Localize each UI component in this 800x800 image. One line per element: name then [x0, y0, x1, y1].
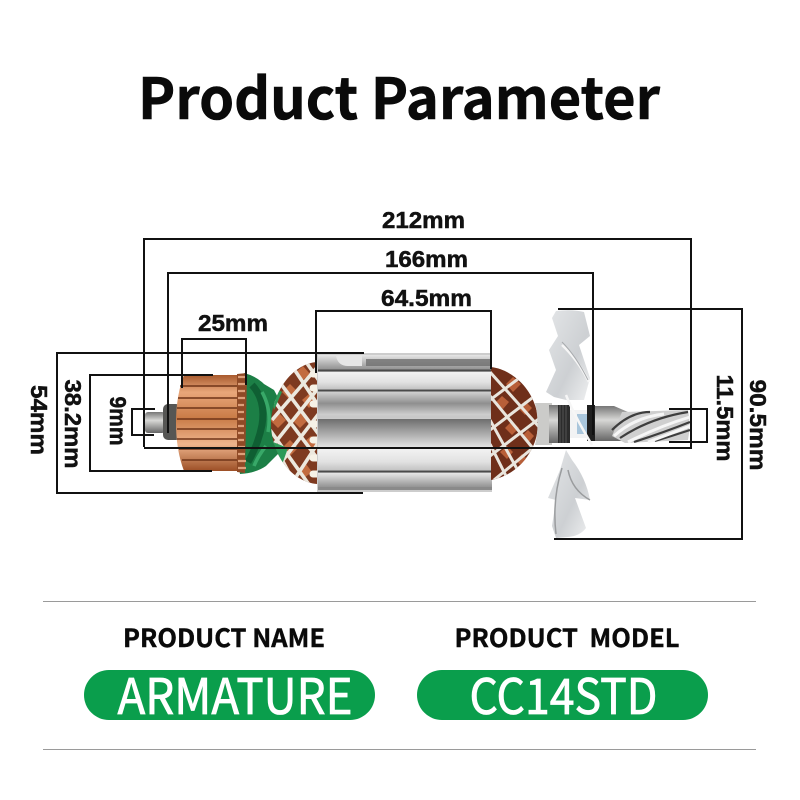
bearing collar — [163, 404, 181, 440]
dimension: 38.2mm bracket — [90, 375, 213, 471]
label: 212mm: 212mm — [382, 207, 465, 233]
label: 9mm: 9mm — [105, 396, 131, 446]
dimension: 90.5mm bracket — [554, 309, 742, 539]
fan blades — [546, 310, 592, 538]
heading: product name: PRODUCT NAME — [123, 619, 325, 655]
label: 64.5mm: 64.5mm — [381, 285, 472, 311]
left winding — [271, 362, 317, 484]
left winding terminals — [313, 374, 317, 474]
heading: product model: PRODUCT MODEL — [454, 619, 680, 655]
dimension: 11.5mm bracket — [669, 409, 707, 442]
dimension lines — [57, 239, 742, 539]
label: 166mm: 166mm — [385, 246, 468, 272]
dimension: 25mm bracket — [182, 339, 246, 388]
product image: armature — [145, 310, 690, 538]
dimension: 64.5mm bracket — [316, 311, 491, 373]
title: Product Parameter — [138, 54, 660, 136]
dimension: 212mm bracket — [144, 239, 691, 448]
commutator — [176, 373, 247, 473]
dimension: 9mm bracket — [132, 409, 155, 435]
label: 25mm: 25mm — [198, 310, 268, 336]
fan hub and right shaft — [535, 403, 628, 445]
dimension: 54mm bracket — [57, 353, 364, 493]
pill: model number: CC14STD — [470, 658, 658, 729]
pill: armature: ARMATURE — [118, 658, 352, 729]
worm gear — [612, 410, 690, 443]
laminated core — [317, 353, 492, 492]
green insulation neck — [234, 373, 290, 474]
bottom divider — [43, 749, 756, 750]
dimension: 166mm bracket — [168, 273, 593, 435]
label: 38.2mm: 38.2mm — [60, 380, 86, 468]
label: 90.5mm: 90.5mm — [745, 380, 771, 470]
label: 54mm: 54mm — [26, 385, 52, 455]
left shaft — [145, 412, 165, 433]
label: 11.5mm: 11.5mm — [712, 374, 738, 462]
top divider — [43, 601, 756, 602]
right winding — [490, 365, 540, 481]
